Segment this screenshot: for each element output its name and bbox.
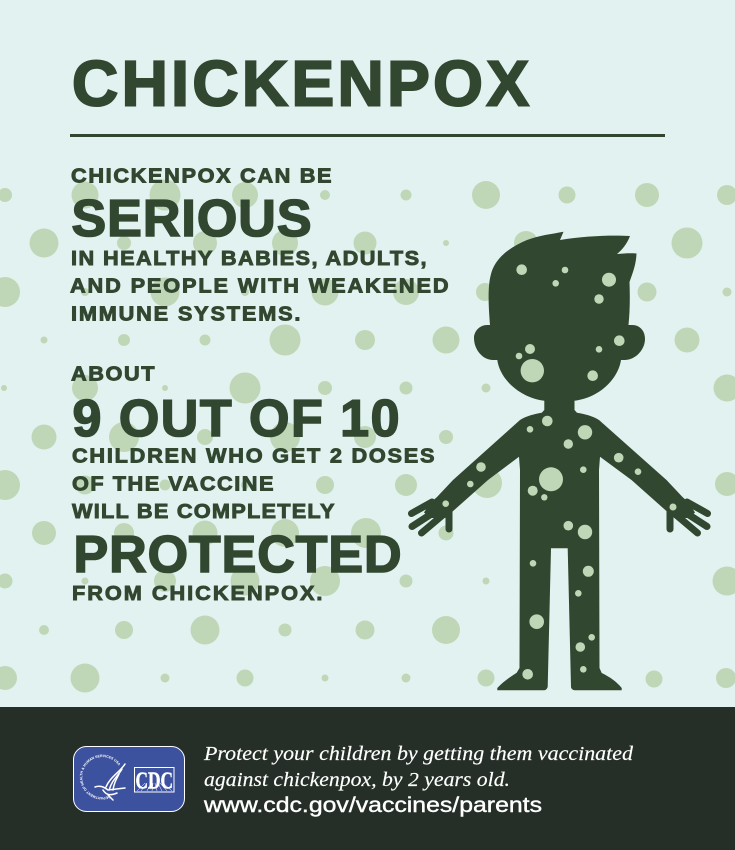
logo: HHS and CDC	[73, 746, 185, 812]
text block: chickenpox can be serious: IN HEALTHY BABIES, ADULTS,	[71, 248, 427, 270]
pox spots	[442, 264, 676, 680]
title rule	[70, 134, 665, 137]
text block: 9 out of 10 protected: OF THE VACCINE	[72, 473, 274, 495]
text block: 9 out of 10 protected: ABOUT	[71, 363, 155, 385]
footer message	[203, 744, 633, 817]
HHS eagle	[95, 764, 125, 800]
right hand fingers	[670, 502, 708, 533]
footer band	[0, 707, 735, 850]
text block: 9 out of 10 protected: FROM CHICKENPOX.	[72, 583, 322, 605]
footer message: www.cdc.gov/vaccines/parents	[203, 794, 542, 817]
footer message: Protect your children by getting them vaccinated	[203, 744, 633, 765]
text block: 9 out of 10 protected: 9 OUT OF 10	[72, 390, 400, 448]
footer message: against chickenpox, by 2 years old.	[204, 770, 510, 791]
text block: chickenpox can be serious: CHICKENPOX CAN BE	[71, 165, 332, 187]
text block: 9 out of 10 protected: PROTECTED	[74, 526, 402, 584]
text block: chickenpox can be serious: SERIOUS	[72, 190, 312, 248]
text block: chickenpox can be serious	[70, 165, 449, 325]
text block: 9 out of 10 protected: WILL BE COMPLETELY	[72, 500, 334, 523]
child silhouette with pox spots	[412, 232, 708, 690]
CDC box	[134, 768, 174, 792]
left hand fingers	[412, 502, 449, 533]
text block: 9 out of 10 protected	[71, 363, 435, 605]
HHS seal text: DEPARTMENT OF HEALTH & HUMAN SERVICES USA	[80, 754, 120, 800]
text block: chickenpox can be serious: IMMUNE SYSTEMS.	[71, 303, 300, 325]
title: CHICKENPOX	[72, 48, 529, 120]
CDC sunburst rays	[137, 783, 172, 791]
text block: 9 out of 10 protected: CHILDREN WHO GET 2 DOSES	[72, 445, 435, 467]
CDC lettering: CDC	[136, 768, 173, 794]
text block: chickenpox can be serious: AND PEOPLE WITH WEAKENED	[70, 275, 449, 297]
background dots pattern	[0, 180, 735, 692]
